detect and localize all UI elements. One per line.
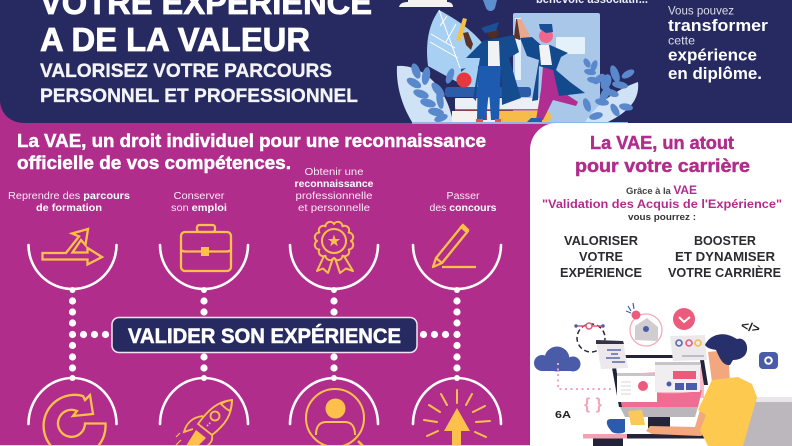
heading: officielle de vos compétences. bbox=[17, 152, 291, 173]
header side text: en diplôme. bbox=[668, 64, 762, 83]
top arcs bbox=[28, 245, 501, 289]
benefit: valoriser: VALORISER bbox=[564, 233, 639, 248]
leaves bbox=[405, 57, 636, 124]
VAE definition: vous pourrez : bbox=[628, 212, 696, 223]
cloud bbox=[534, 346, 580, 372]
gear badge bbox=[759, 352, 778, 369]
header side text: cette bbox=[668, 36, 695, 48]
career heading: La VAE, un atout bbox=[590, 132, 734, 153]
career heading: pour votre carrière bbox=[575, 155, 750, 176]
bottom arcs bbox=[28, 378, 501, 424]
central banner: VALIDER SON EXPÉRIENCE bbox=[128, 325, 401, 348]
books bbox=[445, 87, 531, 97]
label: obtenir: et personnelle bbox=[298, 203, 370, 214]
mug bbox=[607, 419, 625, 434]
illustration: graduates bbox=[397, 10, 638, 124]
benefit: booster: BOOSTER bbox=[694, 233, 757, 248]
benefit: booster bbox=[668, 233, 781, 280]
vector tool bbox=[574, 323, 605, 352]
label: passer: Passer bbox=[446, 191, 480, 202]
header side text: Vous pouvez bbox=[668, 4, 734, 18]
central banner bbox=[112, 318, 417, 352]
label: conserver bbox=[171, 191, 227, 214]
label: obtenir: reconnaissance bbox=[294, 179, 374, 190]
panel: white career section bbox=[530, 123, 792, 446]
door panel bbox=[513, 13, 600, 123]
heading bbox=[17, 130, 486, 173]
icon: pencil bbox=[433, 225, 476, 267]
icon: cloud fragment bbox=[399, 0, 453, 7]
label: reprendre bbox=[8, 191, 130, 214]
icon: medal bbox=[315, 222, 353, 273]
curly braces: { } bbox=[584, 396, 602, 413]
subtitle bbox=[40, 61, 358, 107]
icon: rocket bbox=[176, 400, 232, 446]
donut panel bbox=[670, 335, 707, 361]
panel: magenta rights section bbox=[0, 130, 530, 446]
header side text: expérience bbox=[668, 46, 757, 64]
subtitle: PERSONNEL ET PROFESSIONNEL bbox=[40, 86, 358, 107]
icon: lamp fragment bbox=[483, 0, 497, 11]
panel: header band bbox=[0, 0, 792, 124]
woman bbox=[646, 334, 757, 446]
code window bbox=[596, 340, 628, 369]
envelope badge bbox=[626, 303, 662, 346]
large leaf bbox=[427, 10, 490, 100]
sticky note bbox=[628, 410, 645, 425]
dotted link bbox=[558, 363, 613, 389]
title: A DE LA VALEUR bbox=[40, 21, 310, 58]
monitor bbox=[612, 355, 708, 428]
benefit: valoriser bbox=[560, 233, 642, 280]
label: reprendre: Reprendre des parcours bbox=[8, 191, 130, 202]
illustration base bbox=[412, 122, 628, 124]
label: obtenir: professionnelle bbox=[296, 191, 373, 202]
benefit: valoriser: EXPÉRIENCE bbox=[560, 265, 642, 280]
VAE definition: "Validation des Acquis de l'Expérience" bbox=[542, 197, 782, 211]
heading: La VAE, un droit individuel pour une reconnaissance bbox=[17, 130, 486, 151]
pale left leaf bbox=[397, 66, 453, 122]
label: passer bbox=[430, 191, 497, 214]
diploma bbox=[456, 18, 467, 41]
graduate woman bbox=[517, 19, 585, 122]
benefit: valoriser: VOTRE bbox=[579, 249, 623, 264]
apple bbox=[456, 68, 472, 88]
VAE definition: Grâce à la VAE bbox=[626, 183, 697, 197]
subtitle: VALORISEZ VOTRE PARCOURS bbox=[40, 61, 332, 82]
header side text: transformer bbox=[668, 16, 768, 35]
career heading bbox=[575, 132, 750, 176]
title bbox=[40, 0, 372, 58]
chair headrest bbox=[756, 397, 792, 402]
illustration: woman at computer bbox=[534, 303, 792, 446]
label: conserver: son emploi bbox=[171, 203, 227, 214]
label: obtenir: Obtenir une bbox=[304, 167, 364, 178]
label: conserver: Conserver bbox=[174, 191, 225, 202]
icon: diverging arrows bbox=[42, 229, 102, 264]
icon: person search bbox=[306, 389, 364, 446]
label: passer: des concours bbox=[430, 203, 497, 214]
bottom edge bbox=[0, 445, 530, 446]
pale right leaf bbox=[585, 82, 638, 122]
chair bbox=[743, 397, 792, 446]
desk bbox=[583, 434, 792, 446]
icon: briefcase bbox=[181, 225, 231, 271]
header side text bbox=[668, 4, 768, 83]
icon: refresh bbox=[44, 395, 106, 446]
small letters: 6A bbox=[555, 410, 571, 421]
benefit: booster: VOTRE CARRIÈRE bbox=[668, 265, 781, 280]
VAE definition bbox=[542, 183, 782, 223]
graduate man bbox=[463, 19, 521, 122]
benefit: booster: ET DYNAMISER bbox=[675, 249, 776, 264]
label: obtenir bbox=[294, 167, 374, 214]
icon: upward arrow with rays bbox=[424, 390, 490, 446]
label: reprendre: de formation bbox=[36, 203, 102, 214]
code tag: </> bbox=[740, 318, 761, 336]
check badge bbox=[673, 308, 695, 330]
dotted connectors bbox=[69, 287, 461, 381]
